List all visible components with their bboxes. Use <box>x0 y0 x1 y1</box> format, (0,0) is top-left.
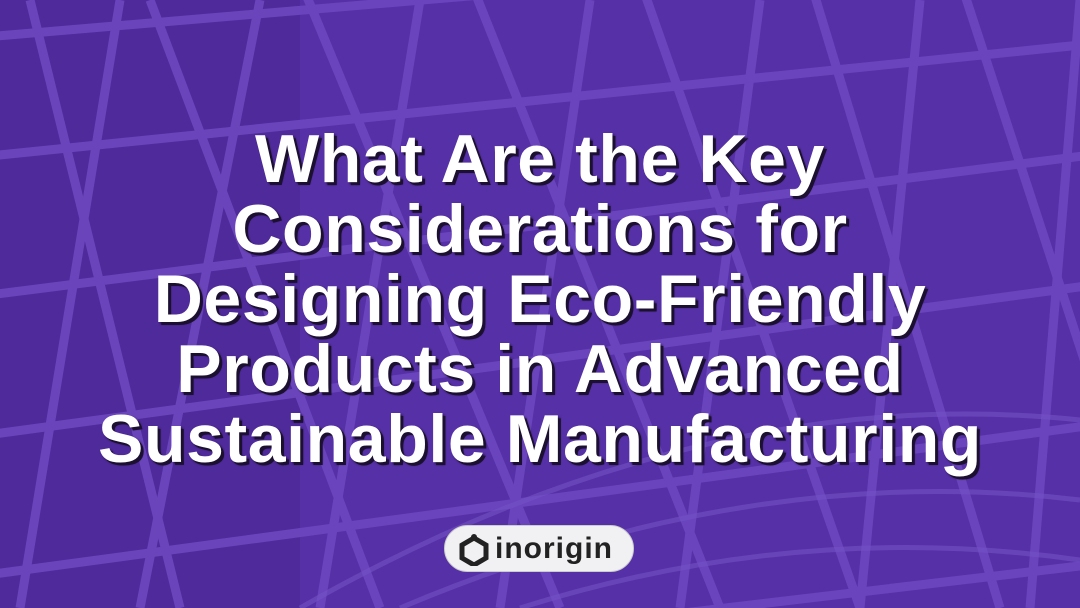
title <box>98 121 982 480</box>
title: What Are the Key <box>255 121 825 197</box>
icon: logo cube <box>460 534 488 566</box>
logo badge: inorigin <box>495 532 613 565</box>
title: Designing Eco-Friendly <box>154 261 926 337</box>
title: Considerations for <box>232 191 848 267</box>
title: Products in Advanced <box>176 331 904 407</box>
logo badge <box>444 525 634 572</box>
title: Sustainable Manufacturing <box>98 401 982 477</box>
